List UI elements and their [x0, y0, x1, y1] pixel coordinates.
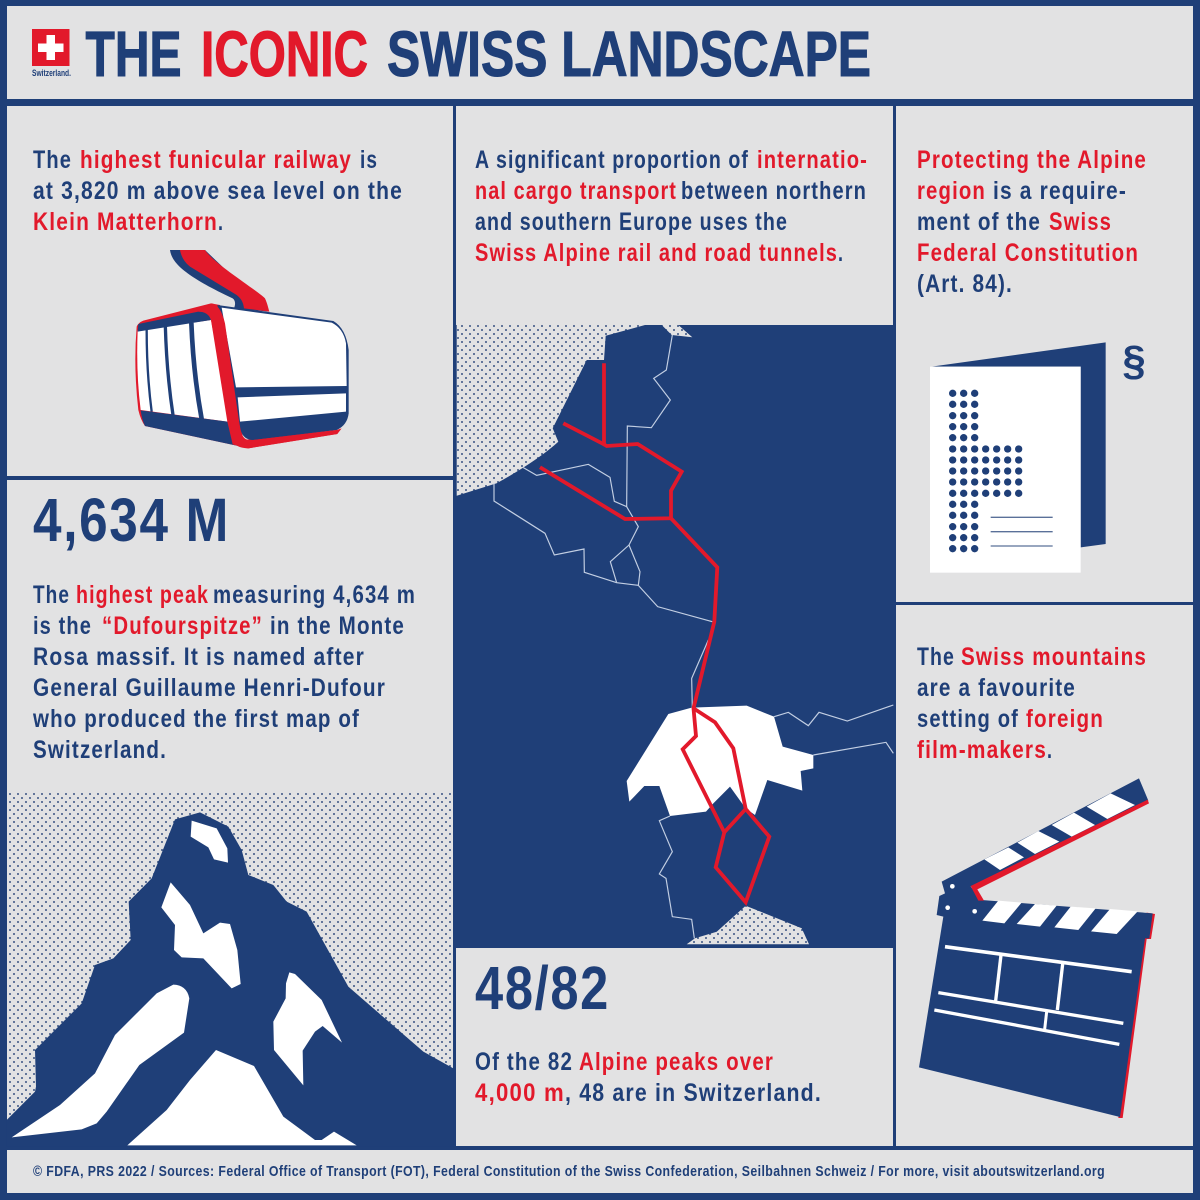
stat: 48/82: 48/82: [475, 954, 610, 1022]
text: constitution: [917, 146, 1147, 298]
text: Alpine peaks: 4,000 m: [475, 1079, 565, 1107]
text: funicular railway: .: [218, 208, 224, 236]
text: highest peak: measuring 4,634 m: [213, 581, 416, 609]
icon: Switzerland logo: Switzerland.: [32, 68, 71, 79]
text: funicular railway: is: [360, 146, 378, 174]
text: funicular railway: at 3,820 m above sea level on the: [33, 177, 403, 205]
text: constitution: ment of the: [917, 208, 1041, 236]
text: cargo transport: internatio-: [757, 146, 868, 174]
text: cargo transport: .: [838, 239, 844, 267]
title: THE: [86, 18, 182, 90]
text: Alpine peaks: [475, 1048, 822, 1107]
title: [86, 18, 871, 90]
illustration: Matterhorn mountain: [7, 793, 453, 1147]
icon: Switzerland logo: [32, 29, 71, 79]
text: funicular railway: highest funicular railway: [80, 146, 352, 174]
text: constitution: Swiss: [1049, 208, 1112, 236]
text: highest peak: Rosa massif. It is named after: [33, 643, 365, 671]
panel: funicular railway: [7, 106, 453, 476]
icon: section sign: §: [1122, 337, 1146, 384]
text: cargo transport: Swiss Alpine rail and road tunnels: [475, 239, 838, 267]
stat: 4,634 M: 4,634 M: [33, 486, 230, 554]
panel: footer: [7, 1150, 1193, 1193]
text: constitution: is a require-: [993, 177, 1127, 205]
text: constitution: Protecting the Alpine: [917, 146, 1147, 174]
text: highest peak: “Dufourspitze”: [102, 612, 263, 640]
icon: cable car: [135, 250, 349, 448]
text: cargo transport: A significant proportion of: [475, 146, 749, 174]
text: cargo transport: nal cargo transport: [475, 177, 677, 205]
text: film-makers: film-makers: [917, 736, 1047, 764]
text: film-makers: are a favourite: [917, 674, 1076, 702]
text: cargo transport: between northern: [681, 177, 867, 205]
text: Alpine peaks: , 48 are in Switzerland.: [565, 1079, 822, 1107]
text: Alpine peaks: Alpine peaks over: [579, 1048, 774, 1076]
title: ICONIC: [201, 18, 368, 90]
text: Alpine peaks: Of the 82: [475, 1048, 573, 1076]
routes: rail and road tunnels: [540, 363, 769, 902]
text: funicular railway: [33, 146, 403, 236]
panel: 48/82 peaks: [456, 948, 893, 1146]
panel: film-makers: [896, 605, 1193, 1146]
text: cargo transport: [475, 146, 868, 267]
text: film-makers: The: [917, 643, 955, 671]
text: constitution: region: [917, 177, 986, 205]
text: film-makers: foreign: [1026, 705, 1104, 733]
text: film-makers: [917, 643, 1147, 764]
text: constitution: (Art. 84).: [917, 270, 1013, 298]
text: highest peak: who produced the first map of: [32, 705, 360, 733]
text: film-makers: .: [1047, 736, 1053, 764]
text: highest peak: The: [33, 581, 70, 609]
panel: constitution: [896, 106, 1193, 602]
text: highest peak: highest peak: [76, 581, 209, 609]
panel: header band: [7, 6, 1193, 99]
text: film-makers: Swiss mountains: [961, 643, 1147, 671]
icon: constitution document: [930, 342, 1106, 573]
panel: highest peak: [7, 480, 453, 793]
text: highest peak: is the: [33, 612, 92, 640]
text: constitution: Federal Constitution: [917, 239, 1139, 267]
text: funicular railway: The: [33, 146, 72, 174]
map: Alpine transport corridors: [456, 325, 893, 947]
icon: clapperboard: [919, 778, 1155, 1118]
text: funicular railway: Klein Matterhorn: [33, 208, 218, 236]
title: SWISS LANDSCAPE: [387, 18, 871, 90]
text: highest peak: General Guillaume Henri-Dufour: [33, 674, 386, 702]
panel: cargo transport: [456, 106, 893, 325]
text: film-makers: setting of: [917, 705, 1019, 733]
text: highest peak: Switzerland.: [33, 736, 167, 764]
text: highest peak: [32, 581, 416, 764]
text: cargo transport: and southern Europe uses the: [475, 208, 788, 236]
text: highest peak: in the Monte: [270, 612, 405, 640]
